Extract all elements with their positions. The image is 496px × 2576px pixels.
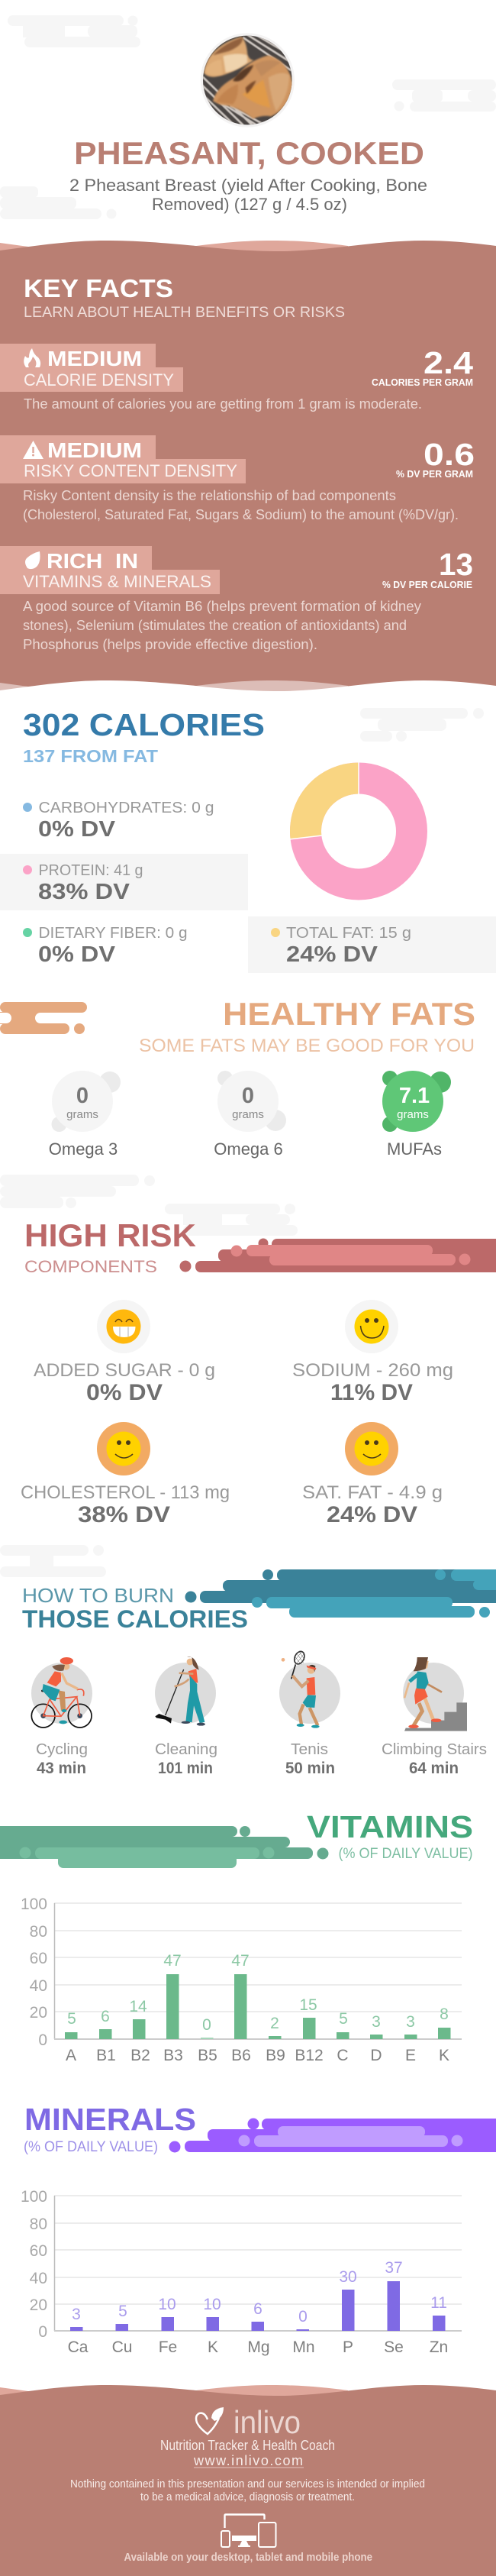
bar chart: vitamins: B9 — [266, 2047, 285, 2064]
item: sodium: SODIUM - 260 mg — [292, 1360, 453, 1381]
subheading: components: COMPONENTS — [24, 1257, 157, 1276]
fact: risky content density: 0.6 — [424, 437, 475, 472]
bar chart: vitamins: 0 — [202, 2016, 211, 2034]
row: total fat: 24% DV — [286, 942, 378, 967]
bar chart: minerals: 10 — [158, 2296, 176, 2313]
bar chart: minerals: 20 — [30, 2296, 47, 2314]
panel: calories — [0, 707, 496, 973]
item: added sugar — [34, 1300, 215, 1405]
bar chart: vitamins: 40 — [30, 1977, 47, 1995]
fact: risky content density: Risky Content density is the relationship of bad components — [23, 488, 396, 503]
bar chart: vitamins: 3 — [372, 2013, 381, 2031]
fact: calorie density — [0, 344, 473, 412]
bar chart: minerals: 0 — [298, 2308, 308, 2326]
bar chart: vitamins: 0 — [38, 2031, 47, 2049]
tagline: Nutrition Tracker & Health Coach — [160, 2438, 335, 2453]
subheading: SOME FATS MAY BE GOOD FOR YOU — [139, 1036, 475, 1056]
row: dietary fiber — [23, 925, 188, 967]
activity: climbing stairs: 64 min — [409, 1760, 459, 1777]
bar chart: vitamins: 5 — [67, 2010, 76, 2028]
bar chart: vitamins: 47 — [163, 1952, 182, 1970]
stat: MUFAs: grams — [397, 1108, 429, 1121]
bar chart: vitamins: 5 — [339, 2010, 348, 2028]
disclaimer: Nothing contained in this presentation and our services is intended or implied — [70, 2477, 425, 2490]
website link: www.inlivo.com — [193, 2453, 303, 2468]
bar chart: vitamins: B1 — [96, 2047, 116, 2064]
title: PHEASANT, COOKED — [74, 135, 424, 171]
bar chart: minerals: 40 — [30, 2270, 47, 2287]
panel: minerals — [21, 2102, 496, 2356]
fact: calorie density: CALORIE DENSITY — [24, 370, 174, 389]
icon: leaf — [25, 551, 40, 569]
panel: how to burn those calories — [22, 1569, 496, 1777]
bar chart: minerals: Cu — [112, 2338, 132, 2356]
stat: MUFAs: 7.1 — [399, 1084, 430, 1108]
fact: calorie density: CALORIES PER GRAM — [372, 377, 473, 388]
stat: MUFAs: MUFAs — [387, 1139, 442, 1159]
item: sodium — [292, 1300, 453, 1405]
fact: risky content density — [0, 435, 475, 522]
row: protein: PROTEIN: 41 g — [38, 862, 143, 879]
heading: minerals: MINERALS — [24, 2102, 196, 2137]
bar chart: vitamins: E — [405, 2047, 416, 2064]
bar chart: vitamins: 47 — [231, 1952, 250, 1970]
bar chart: minerals: Mn — [292, 2338, 315, 2356]
decoration: orange bars — [0, 1002, 89, 1034]
fact: risky content density: % DV PER GRAM — [396, 468, 473, 480]
row: total fat — [248, 916, 496, 973]
item: saturated fat — [302, 1422, 443, 1527]
activity: climbing stairs — [382, 1657, 487, 1777]
subheading: from fat: 137 FROM FAT — [23, 746, 158, 766]
bar chart: vitamins: C — [337, 2047, 349, 2064]
stat: MUFAs — [382, 1071, 451, 1159]
activity: cleaning: Cleaning — [155, 1741, 217, 1758]
decoration: red bars — [180, 1239, 496, 1272]
subheading: (% OF DAILY VALUE) — [339, 1846, 473, 1862]
panel: key facts — [0, 241, 496, 706]
stat: omega 3 — [49, 1071, 121, 1159]
fact: rich in vitamins and minerals: stones), Selenium (stimulates the creation of antioxidants) and — [23, 618, 407, 633]
bar chart: minerals: Zn — [430, 2338, 448, 2356]
row: dietary fiber: 0% DV — [38, 942, 116, 967]
activity: cycling: Cycling — [36, 1741, 88, 1758]
item: added sugar: ADDED SUGAR - 0 g — [34, 1360, 215, 1381]
bar chart: minerals: 0 — [38, 2323, 47, 2341]
row: protein: 83% DV — [38, 880, 130, 904]
bar chart: vitamins: 20 — [30, 2004, 47, 2022]
icon: flame — [24, 348, 40, 367]
item: saturated fat: SAT. FAT - 4.9 g — [302, 1482, 443, 1503]
activity: climbing stairs: Climbing Stairs — [382, 1741, 487, 1758]
panel: vitamins — [0, 1809, 473, 2064]
stat: omega 6 — [214, 1071, 286, 1159]
bar chart: vitamins: B5 — [198, 2047, 217, 2064]
icon: warning — [23, 441, 43, 459]
bar chart: minerals: Se — [384, 2338, 404, 2356]
activity: cycling: 43 min — [37, 1760, 86, 1777]
icon: food photo — [201, 34, 295, 127]
decoration: green bars — [0, 1826, 328, 1868]
panel: high risk components — [21, 1217, 496, 1527]
row: total fat: TOTAL FAT: 15 g — [286, 925, 411, 942]
stat: omega 3: Omega 3 — [49, 1139, 118, 1159]
bar chart: vitamins: 80 — [30, 1923, 47, 1941]
bar chart: vitamins: 2 — [270, 2015, 279, 2032]
row: carbohydrates — [23, 800, 214, 842]
bar chart: vitamins: 6 — [101, 2008, 110, 2025]
fact: rich in vitamins and minerals: % DV PER CALORIE — [382, 579, 472, 590]
subtitle — [69, 176, 427, 214]
bar chart: vitamins: B6 — [231, 2047, 251, 2064]
panel: healthy fats — [0, 996, 475, 1159]
activity: tennis: Tenis — [291, 1741, 328, 1758]
fact: risky content density: RISKY CONTENT DENSITY — [24, 461, 237, 480]
bar chart: vitamins: 3 — [406, 2013, 415, 2031]
activity: cleaning — [155, 1657, 217, 1777]
bar chart: vitamins: B12 — [295, 2047, 324, 2064]
item: added sugar: 0% DV — [86, 1380, 163, 1405]
bar chart: minerals: 80 — [30, 2216, 47, 2233]
bar chart: vitamins: 14 — [129, 1998, 147, 2015]
fact: rich in vitamins and minerals: Phosphorus (helps provide effective digestion). — [23, 637, 317, 652]
heading: calories: 302 CALORIES — [23, 707, 265, 742]
decoration: purple bars — [169, 2119, 496, 2152]
bar chart: minerals: Mg — [247, 2338, 270, 2356]
bar chart: vitamins: 8 — [440, 2006, 449, 2023]
row: carbohydrates: 0% DV — [38, 817, 116, 842]
fact: rich in vitamins and minerals — [0, 546, 473, 652]
bar chart: minerals: 6 — [253, 2300, 262, 2318]
fact: calorie density: 2.4 — [424, 345, 473, 380]
bar chart: minerals: 60 — [30, 2242, 47, 2260]
donut chart — [289, 762, 412, 884]
stat: omega 3: 0 — [76, 1084, 89, 1108]
bar chart: minerals: 11 — [430, 2294, 447, 2312]
bar chart: vitamins: B2 — [130, 2047, 150, 2064]
bar chart: vitamins: 60 — [30, 1950, 47, 1967]
bar chart: minerals: 3 — [72, 2306, 81, 2323]
heading: those calories: THOSE CALORIES — [22, 1605, 248, 1633]
row: dietary fiber: DIETARY FIBER: 0 g — [38, 925, 188, 942]
bar chart: minerals: P — [343, 2338, 353, 2356]
bar chart: vitamins: 100 — [21, 1896, 47, 1913]
bar chart: minerals: 30 — [339, 2268, 357, 2286]
heading: how to burn: HOW TO BURN — [22, 1584, 174, 1607]
disclaimer — [70, 2477, 425, 2503]
fact: calorie density: The amount of calories you are getting from 1 gram is moderate. — [24, 396, 422, 412]
item: sodium: 11% DV — [330, 1380, 413, 1405]
fact: rich in vitamins and minerals: RICH IN — [47, 549, 138, 573]
bar chart: minerals: Fe — [159, 2338, 177, 2356]
availability note: Available on your desktop, tablet and mobile phone — [124, 2551, 372, 2564]
decoration: teal bars — [185, 1569, 496, 1618]
bar chart: vitamins: K — [439, 2047, 449, 2064]
bar chart: vitamins: B3 — [163, 2047, 183, 2064]
bar chart: vitamins: A — [66, 2047, 76, 2064]
heading: vitamins: VITAMINS — [307, 1809, 473, 1844]
logo: inlivo — [196, 2404, 301, 2440]
panel: footer — [0, 2385, 496, 2576]
item: cholesterol — [21, 1422, 230, 1527]
disclaimer: to be a medical advice, diagnosis or treatment. — [140, 2490, 355, 2503]
fact: calorie density: MEDIUM — [47, 347, 142, 370]
fact: risky content density: MEDIUM — [47, 438, 142, 462]
subtitle: Removed) (127 g / 4.5 oz) — [152, 195, 347, 214]
bar chart: vitamins: 15 — [299, 1996, 317, 2014]
activity: cleaning: 101 min — [158, 1760, 213, 1777]
stat: omega 3: grams — [66, 1108, 98, 1121]
bar chart: minerals: K — [208, 2338, 218, 2356]
item: cholesterol: 38% DV — [78, 1502, 170, 1527]
item: saturated fat: 24% DV — [327, 1502, 417, 1527]
heading: key facts: KEY FACTS — [24, 274, 173, 302]
bar chart: minerals: 10 — [203, 2296, 221, 2313]
bar chart: minerals: Ca — [68, 2338, 89, 2356]
fact: risky content density: (Cholesterol, Saturated Fat, Sugars & Sodium) to the amount (%DV/gr). — [23, 507, 459, 522]
item: cholesterol: CHOLESTEROL - 113 mg — [21, 1482, 230, 1503]
bar chart: minerals: 100 — [21, 2188, 47, 2206]
activity: tennis — [279, 1650, 340, 1777]
bar chart: minerals: 37 — [385, 2259, 403, 2277]
fact: rich in vitamins and minerals: A good source of Vitamin B6 (helps prevent formation of kidney — [23, 599, 421, 614]
bar chart: vitamins — [21, 1896, 462, 2064]
row: protein — [0, 854, 248, 910]
activity: tennis: 50 min — [285, 1760, 335, 1777]
icon: devices — [221, 2514, 276, 2547]
row: carbohydrates: CARBOHYDRATES: 0 g — [38, 800, 214, 816]
bar chart: vitamins: D — [370, 2047, 382, 2064]
subheading: LEARN ABOUT HEALTH BENEFITS OR RISKS — [24, 305, 345, 321]
stat: omega 6: 0 — [242, 1084, 254, 1108]
stat: omega 6: grams — [232, 1108, 264, 1121]
heading: healthy fats: HEALTHY FATS — [223, 996, 475, 1032]
logo: inlivo: inlivo — [234, 2404, 301, 2440]
activity: cycling — [31, 1657, 92, 1777]
fact: rich in vitamins and minerals: 13 — [439, 547, 473, 582]
subheading: (% OF DAILY VALUE) — [24, 2139, 158, 2155]
stat: omega 6: Omega 6 — [214, 1139, 283, 1159]
subtitle: 2 Pheasant Breast (yield After Cooking, Bone — [69, 176, 427, 195]
bar chart: minerals: 5 — [118, 2303, 127, 2320]
fact: rich in vitamins and minerals: VITAMINS & MINERALS — [23, 572, 211, 591]
heading: high risk: HIGH RISK — [24, 1217, 196, 1253]
bar chart: minerals — [21, 2188, 462, 2356]
